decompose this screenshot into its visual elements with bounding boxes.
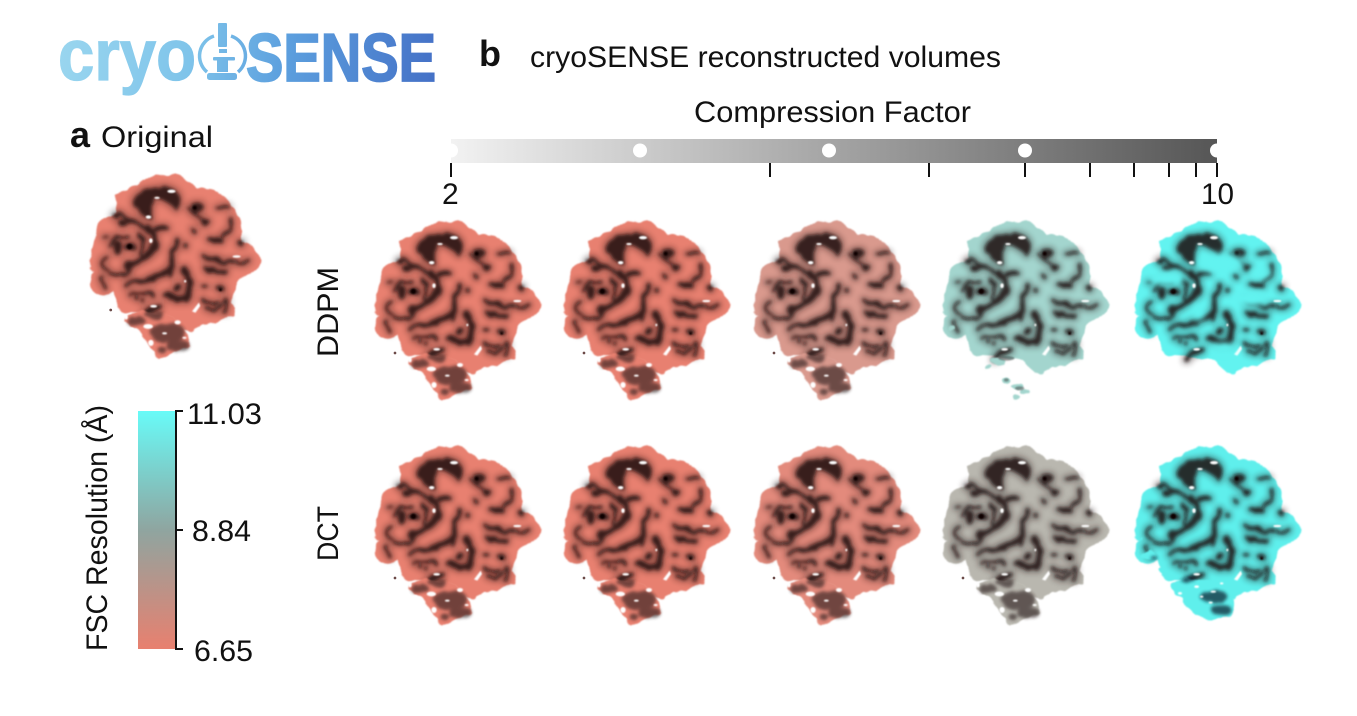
compression factor bar bbox=[442, 139, 1234, 211]
logo: cryoSENSE bbox=[58, 16, 436, 96]
volume: DCT factor 4 bbox=[751, 447, 921, 624]
tick label 10: 10 bbox=[1201, 178, 1234, 211]
volume: DDPM factor 6 bbox=[940, 222, 1110, 399]
logo word: cryo: cryo bbox=[58, 16, 196, 96]
panel label b: b bbox=[479, 33, 501, 74]
row label: DCT: DCT bbox=[312, 506, 345, 561]
colorbar: FSC resolution bbox=[81, 398, 262, 668]
row label: DDPM: DDPM bbox=[312, 267, 345, 357]
volume: DCT factor 3 bbox=[561, 447, 731, 624]
volume: original bbox=[88, 175, 263, 357]
volume: DDPM factor 3 bbox=[561, 222, 731, 399]
heading: cryoSENSE reconstructed volumes: cryoSENSE reconstructed volumes bbox=[530, 41, 1001, 74]
tick label 2: 2 bbox=[442, 178, 459, 211]
panel label a: a bbox=[70, 114, 91, 155]
volume: DDPM factor 10 bbox=[1132, 222, 1302, 375]
volume: DDPM factor 2 bbox=[372, 222, 542, 399]
colorbar label 8.84: 8.84 bbox=[192, 515, 251, 548]
volume: DCT factor 2 bbox=[372, 447, 542, 624]
logo word: SENSE: SENSE bbox=[246, 20, 436, 96]
volume: DDPM factor 4 bbox=[751, 222, 921, 399]
colorbar label 11.03: 11.03 bbox=[187, 398, 262, 431]
heading: Original: Original bbox=[101, 121, 213, 154]
volume: DCT factor 10 bbox=[1132, 447, 1302, 620]
icon: microscope bbox=[200, 23, 245, 80]
colorbar title: FSC Resolution (Å) bbox=[81, 405, 114, 651]
colorbar label 6.65: 6.65 bbox=[194, 635, 253, 668]
volume: DCT factor 6 bbox=[940, 447, 1110, 624]
axis title: Compression Factor: Compression Factor bbox=[694, 96, 971, 129]
